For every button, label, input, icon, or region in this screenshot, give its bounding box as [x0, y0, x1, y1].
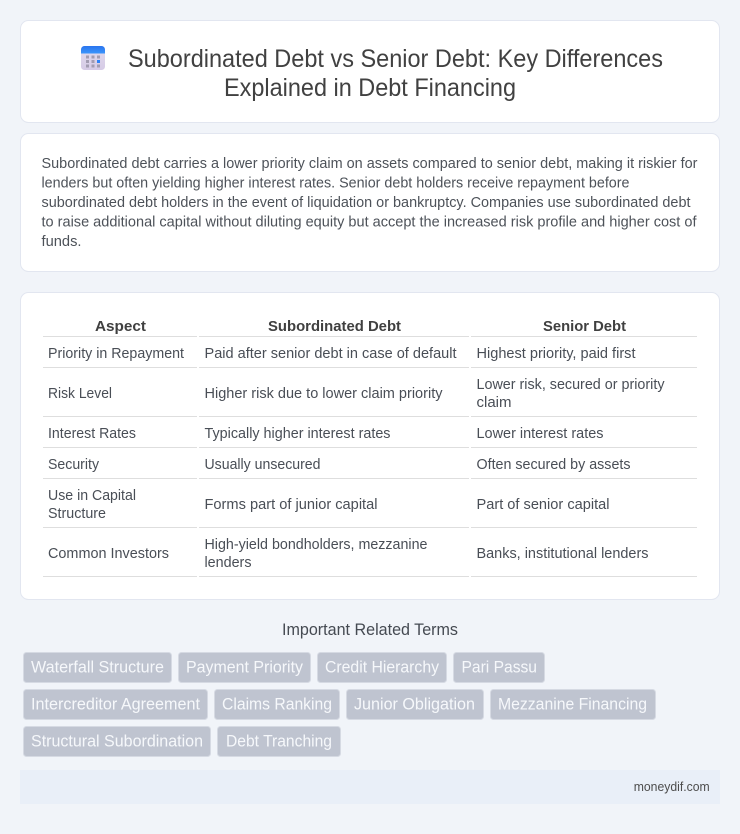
row: priority in repayment: Paid after senior debt in case of default [204, 346, 456, 362]
tag labels: Debt Tranching [226, 732, 332, 750]
tag labels: Intercreditor Agreement [31, 696, 200, 714]
row: security [48, 457, 630, 473]
row: common investors: Banks, institutional lenders [476, 546, 648, 562]
text block: summary: to raise additional capital without diluting equity but accept the increased risk profile and higher cost of [42, 214, 697, 230]
table header: Aspect [95, 319, 146, 335]
table header: Subordinated Debt [268, 319, 401, 335]
text block: summary: lenders but often yielding higher interest rates. Senior debt holders receive repayment before [42, 176, 630, 192]
table header: Senior Debt [543, 319, 626, 335]
heading: related terms: Important Related Terms [282, 621, 458, 639]
tag labels: Pari Passu [462, 658, 537, 676]
row: use in capital structure: Part of senior capital [476, 497, 610, 513]
row: common investors [48, 537, 648, 571]
panel: comparison table [20, 292, 720, 600]
title: Explained in Debt Financing [224, 74, 516, 102]
row: security: Often secured by assets [476, 457, 630, 473]
row: common investors: Common Investors [48, 546, 169, 562]
row: common investors: lenders [204, 555, 252, 571]
row: use in capital structure: Use in Capital [48, 488, 136, 504]
row: priority in repayment: Priority in Repayment [48, 346, 184, 362]
row: use in capital structure: Forms part of junior capital [204, 497, 378, 513]
tag labels: Credit Hierarchy [325, 658, 440, 676]
row: security: Security [48, 457, 100, 473]
row: risk level: Higher risk due to lower claim priority [204, 386, 443, 402]
row: interest rates [48, 426, 604, 442]
row: common investors: High-yield bondholders, mezzanine [204, 537, 428, 553]
footer: moneydif.com [634, 779, 710, 794]
row: use in capital structure: Structure [48, 506, 106, 522]
row: priority in repayment [48, 346, 636, 362]
text block: summary [42, 156, 698, 250]
panel: related term tags [24, 652, 656, 756]
row: risk level [48, 377, 665, 411]
row: interest rates: Typically higher interest rates [204, 426, 390, 442]
title: Subordinated Debt vs Senior Debt: Key Differences [128, 45, 663, 73]
row: use in capital structure [48, 488, 610, 522]
row: priority in repayment: Highest priority, paid first [476, 346, 636, 362]
row: risk level: Risk Level [48, 386, 112, 402]
panel: summary paragraph [20, 134, 720, 272]
row: interest rates: Interest Rates [48, 426, 136, 442]
tag labels: Waterfall Structure [31, 658, 164, 676]
tag labels: Mezzanine Financing [498, 696, 647, 714]
tag labels: Structural Subordination [31, 732, 203, 750]
text block: summary: Subordinated debt carries a lower priority claim on assets compared to senior debt, making it riskier for [42, 156, 698, 172]
row: risk level: claim [476, 395, 512, 411]
tag labels: Payment Priority [186, 658, 304, 676]
row: interest rates: Lower interest rates [476, 426, 604, 442]
text block: summary: subordinated debt holders in the event of liquidation or bankruptcy. Companies use subordinated debt [42, 195, 690, 211]
tag labels [31, 658, 647, 750]
footer [20, 770, 720, 804]
panel: title card [20, 20, 720, 122]
icon: calendar [81, 46, 105, 70]
title [128, 45, 663, 102]
tag labels: Claims Ranking [222, 696, 332, 714]
text block: summary: funds. [42, 234, 82, 250]
table header [95, 319, 626, 335]
row: risk level: Lower risk, secured or priority [476, 377, 665, 393]
row: security: Usually unsecured [204, 457, 320, 473]
tag labels: Junior Obligation [354, 696, 475, 714]
